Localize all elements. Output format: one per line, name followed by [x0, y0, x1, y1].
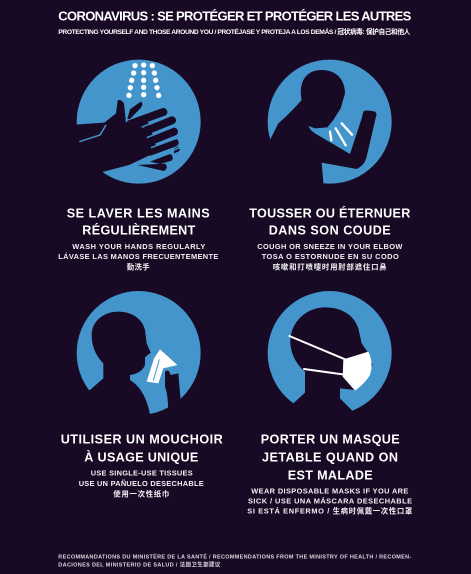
- heading: tissue: À USAGE UNIQUE: [84, 449, 198, 464]
- footer note: [58, 552, 411, 569]
- translations: cough in elbow: 咳嗽和打喷嚏时用肘部遮住口鼻: [273, 262, 387, 272]
- subtitle: PROTECTING YOURSELF AND THOSE AROUND YOU / PROTÉJASE Y PROTEJA A LOS DEMÁS / 冠状病毒: 保护自己和他人: [58, 27, 411, 36]
- translations: mask: SICK / USE UNA MÁSCARA DESECHABLE: [248, 496, 412, 505]
- heading: wash hands: SE LAVER LES MAINS: [67, 206, 210, 220]
- panel: wear a mask: [247, 291, 413, 516]
- footer note: DACIONES DEL MINISTERIO DE SALUD / 法国卫生部建议: [58, 561, 221, 569]
- translations: tissue: USE SINGLE-USE TISSUES: [91, 469, 193, 478]
- heading: cough in elbow: TOUSSER OU ÉTERNUER: [249, 205, 410, 220]
- heading: mask: EST MALADE: [288, 468, 373, 482]
- heading: tissue: UTILISER UN MOUCHOIR: [61, 433, 223, 447]
- translations: tissue: 使用一次性纸巾: [113, 490, 169, 499]
- hand: [165, 370, 181, 417]
- title: CORONAVIRUS : SE PROTÉGER ET PROTÉGER LES AUTRES: [58, 9, 412, 24]
- translations: wash hands: LÁVASE LAS MANOS FRECUENTEMENTE: [58, 252, 218, 261]
- heading: tissue: [61, 433, 223, 464]
- heading: wash hands: RÉGULIÈREMENT: [82, 223, 196, 238]
- icon: person coughing into elbow: [263, 60, 392, 190]
- cough lines: [330, 123, 352, 145]
- translations: cough in elbow: COUGH OR SNEEZE IN YOUR ELBOW: [257, 242, 402, 251]
- mask straps: [289, 336, 345, 374]
- translations: mask: [247, 486, 413, 516]
- heading: mask: PORTER UN MASQUE: [261, 433, 400, 447]
- footer note: RECOMMANDATIONS DU MINISTÈRE DE LA SANTÉ / RECOMMENDATIONS FROM THE MINISTRY OF HEALTH / RECOMEN-: [58, 552, 411, 560]
- mask: [343, 352, 372, 391]
- translations: wash hands: 勤洗手: [127, 262, 150, 272]
- heading: mask: JETABLE QUAND ON: [262, 450, 398, 464]
- translations: mask: SI ESTÁ ENFERMO / 生病时佩戴一次性口罩: [247, 507, 413, 516]
- heading: wash hands: [67, 206, 210, 238]
- panel: wash hands: [58, 60, 218, 272]
- header: [58, 9, 412, 36]
- tissue: [147, 349, 177, 383]
- icon: person with tissue: [77, 291, 201, 420]
- water drops: [126, 62, 161, 98]
- translations: tissue: USE UN PAÑUELO DESECHABLE: [79, 479, 204, 488]
- translations: wash hands: WASH YOUR HANDS REGULARLY: [72, 242, 205, 251]
- translations: tissue: [79, 469, 204, 499]
- translations: cough in elbow: [257, 242, 402, 272]
- translations: mask: WEAR DISPOSABLE MASKS IF YOU ARE: [251, 486, 408, 495]
- heading: mask: [261, 433, 400, 482]
- translations: wash hands: [58, 242, 218, 272]
- icon: person wearing mask: [268, 291, 392, 420]
- translations: cough in elbow: TOSA O ESTORNUDE EN SU CODO: [262, 252, 399, 261]
- panel: single-use tissue: [61, 291, 223, 499]
- icon: hands under water: [70, 60, 201, 184]
- heading: cough in elbow: [249, 205, 410, 238]
- panel: cough in elbow: [249, 60, 410, 272]
- heading: cough in elbow: DANS SON COUDE: [269, 224, 391, 238]
